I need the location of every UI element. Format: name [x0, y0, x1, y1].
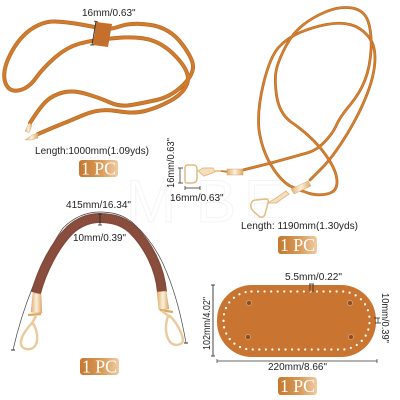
- panel: leather bag bottom: [202, 272, 390, 396]
- strap slider: [93, 22, 112, 47]
- dimension: arc length: [13, 212, 186, 350]
- label: slider size: 16mm/0.63": [82, 8, 136, 19]
- oval leather base: [217, 285, 376, 357]
- label: inset: 10mm/0.39": [379, 293, 390, 343]
- badge: quantity: 1 PC: [280, 235, 315, 255]
- stitching holes: [224, 292, 370, 350]
- dimension end ticks: [11, 343, 188, 350]
- badge: quantity: 1 PC: [81, 158, 116, 178]
- label: thickness: 10mm/0.39": [73, 233, 126, 244]
- dimension: hole inset: [374, 318, 381, 323]
- label: arc length: 415mm/16.34": [66, 200, 131, 211]
- label: hole size: 5.5mm/0.22": [285, 272, 342, 283]
- right ferrule: [157, 291, 169, 310]
- badge: quantity: 1 PC: [82, 356, 117, 376]
- panel: braided handle 415mm: [11, 200, 188, 376]
- label: height: 102mm/4.02": [202, 297, 213, 350]
- label: ring width: 16mm/0.63": [170, 193, 224, 204]
- dimension: height: [211, 285, 215, 356]
- panel: adjustable leather strap 1000mm: [4, 8, 193, 178]
- left ferrule: [31, 293, 42, 313]
- watermark: B: [196, 168, 236, 235]
- dimension: width: [217, 359, 377, 363]
- label: width: 220mm/8.66": [268, 362, 327, 373]
- strap: orange leather loop: [4, 21, 193, 134]
- metal tip top: [25, 123, 32, 133]
- badge: quantity: 1 PC: [280, 376, 315, 396]
- label: length: Length: 1190mm(1.30yds): [241, 221, 358, 232]
- watermark: M: [126, 168, 176, 235]
- right swivel clasp: [160, 310, 183, 345]
- handle: braided brown rope: [36, 218, 162, 293]
- strap: thin orange double loop: [243, 7, 375, 195]
- watermark: E: [244, 168, 284, 235]
- dimension: ring height: [178, 168, 183, 183]
- dimension: ring width: [185, 186, 200, 190]
- dimension: hole size: [309, 284, 314, 292]
- dimension: rope thickness: [98, 214, 102, 225]
- clasp: lower swivel with D ring: [251, 181, 311, 217]
- metal tip bottom: [25, 133, 38, 140]
- clasp: upper swivel with D ring: [185, 165, 243, 183]
- panel: thin leather strap 1190mm: [166, 7, 375, 255]
- label: length: Length:1000mm(1.09yds): [35, 146, 149, 157]
- watermark: [126, 168, 284, 235]
- label: ring height: 16mm/0.63": [166, 138, 177, 188]
- rivets: [245, 300, 354, 340]
- left swivel clasp: [21, 314, 41, 349]
- dimension: slider width: [90, 21, 98, 45]
